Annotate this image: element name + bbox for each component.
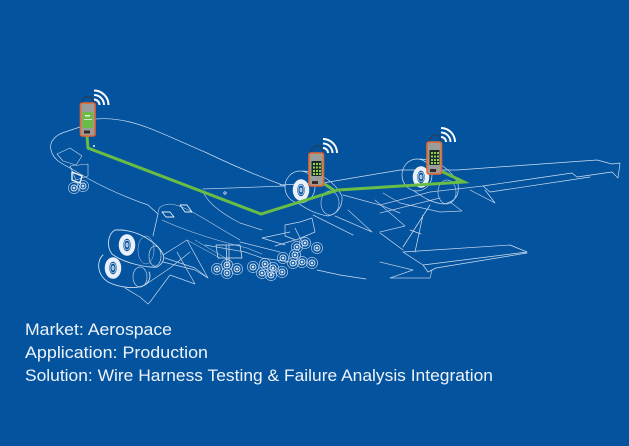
main landing gear: [205, 218, 323, 281]
fuselage outline: [51, 119, 285, 254]
right wing: [280, 160, 620, 235]
device 1: [80, 97, 95, 136]
caption text: Application: Production: [25, 343, 208, 362]
device 3: [427, 135, 442, 174]
wifi icon 2: [323, 139, 337, 153]
green cable: [87, 136, 464, 214]
upper engine 3: [402, 159, 458, 204]
tail: [317, 205, 527, 279]
caption text: Market: Aerospace: [25, 320, 172, 339]
lower engine 2: [99, 255, 150, 288]
aircraft wireframe: [51, 119, 620, 304]
wifi icon 3: [441, 128, 455, 142]
left wing: [125, 240, 232, 304]
lower engine 1: [108, 230, 164, 267]
wifi icon 1: [94, 90, 108, 105]
caption text: [25, 320, 493, 385]
device 2: [309, 146, 324, 186]
nose gear: [57, 148, 89, 194]
upper engine 2: [285, 171, 342, 216]
caption text: Solution: Wire Harness Testing & Failure Analysis Integration: [25, 366, 493, 385]
